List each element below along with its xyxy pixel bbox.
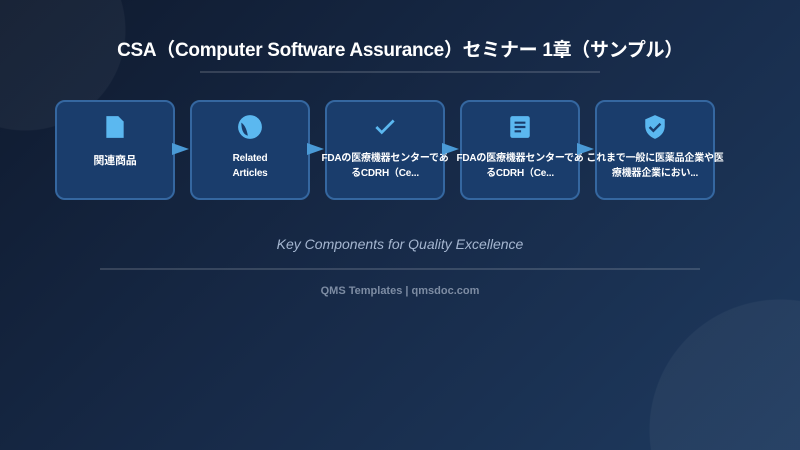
panel: これまで: 療機器企業におい... bbox=[612, 168, 698, 179]
title: CSA（Computer Software Assurance）セミナー 1章（サンプル） bbox=[117, 40, 683, 61]
icon: leaf circle bbox=[238, 115, 262, 139]
subtitle: Key Components for Quality Excellence bbox=[277, 236, 523, 252]
icon: shield check bbox=[645, 115, 665, 139]
panel: FDA 1 bbox=[325, 100, 445, 200]
panel: これまで: これまで一般に医薬品企業や医 bbox=[586, 153, 724, 164]
panel: 関連商品: 関連商品 bbox=[93, 155, 137, 167]
icon: document bbox=[106, 116, 124, 138]
arrow 3 bbox=[442, 143, 459, 155]
panel: FDA 1: FDAの医療機器センターであ bbox=[321, 153, 449, 164]
footer: QMS Templates | qmsdoc.com bbox=[321, 285, 479, 297]
icon: note bbox=[510, 116, 530, 138]
icon: check bbox=[376, 120, 394, 134]
panel: FDA 2: るCDRH（Ce... bbox=[486, 168, 554, 179]
panel: FDA 1: るCDRH（Ce... bbox=[351, 168, 419, 179]
panel: FDA 2 bbox=[460, 100, 580, 200]
panel: これまで bbox=[595, 100, 715, 200]
panel: Related Articles bbox=[190, 100, 310, 200]
panel: FDA 2: FDAの医療機器センターであ bbox=[456, 153, 584, 164]
panel: 関連商品 bbox=[55, 100, 175, 200]
arrow 2 bbox=[307, 143, 324, 155]
arrow 1 bbox=[172, 143, 189, 155]
arrow 4 bbox=[577, 143, 594, 155]
panel: Related Articles: Related bbox=[233, 153, 267, 164]
panel: Related Articles: Articles bbox=[232, 168, 268, 179]
